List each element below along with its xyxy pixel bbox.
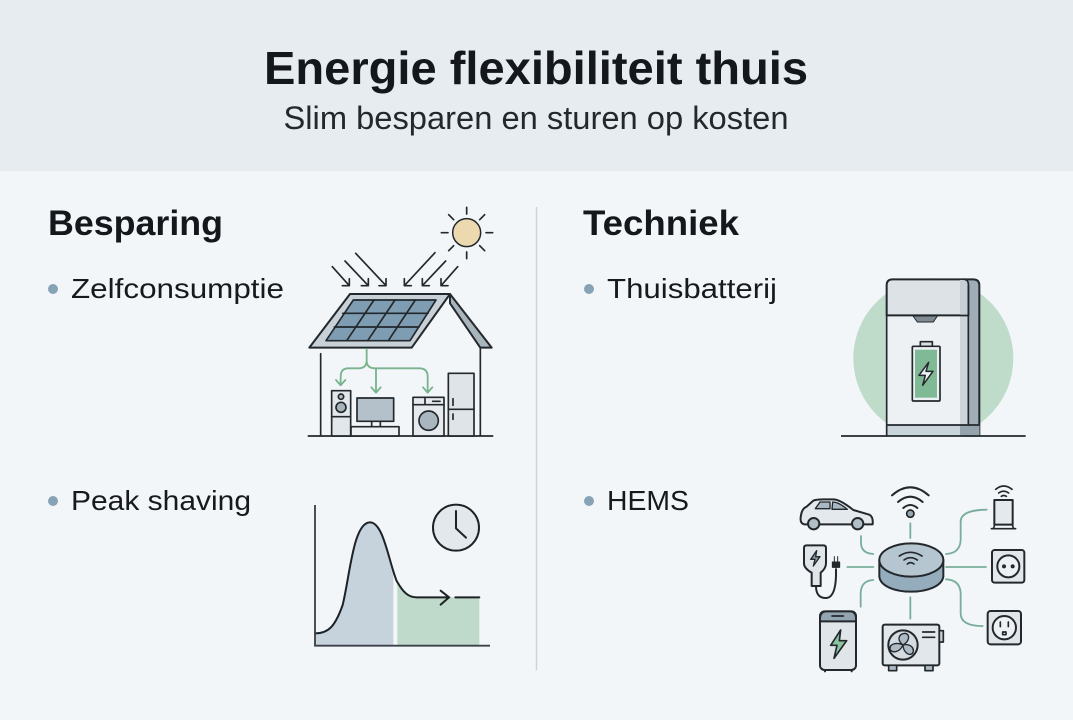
chart fill: shifted load xyxy=(397,582,479,645)
illustration: home battery xyxy=(841,278,1026,436)
list item: HEMS: HEMS xyxy=(607,485,689,516)
icon: sun xyxy=(441,207,493,259)
roof and solar panel xyxy=(309,294,492,348)
heading: Techniek: Techniek xyxy=(583,204,740,243)
appliance: television xyxy=(351,398,399,436)
illustration: HEMS network xyxy=(801,486,1024,671)
icon: heat pump xyxy=(883,625,943,671)
icon: wifi xyxy=(892,487,929,517)
icon: US socket xyxy=(988,611,1021,644)
appliance: refrigerator xyxy=(448,373,474,436)
load curve xyxy=(315,522,479,633)
illustration: house with solar panels xyxy=(308,207,493,436)
icon: router xyxy=(991,486,1016,529)
arrows: sunlight xyxy=(332,253,458,286)
heading: Besparing: Besparing xyxy=(48,204,223,243)
battery symbol xyxy=(912,342,940,401)
ground line xyxy=(841,433,1026,438)
icon: car xyxy=(801,499,873,529)
battery cabinet xyxy=(887,279,979,436)
chart: peak shaving xyxy=(315,505,490,646)
icon: home battery xyxy=(820,611,856,671)
list item: Zelfconsumptie: Zelfconsumptie xyxy=(71,273,284,304)
arrows: green energy flow xyxy=(336,349,432,393)
icon: EV charger xyxy=(804,545,840,598)
appliance: washing machine xyxy=(413,397,444,436)
appliance: speaker xyxy=(332,391,351,436)
list item: Thuisbatterij: Thuisbatterij xyxy=(607,273,777,304)
hub device xyxy=(879,543,943,592)
connectors xyxy=(847,510,987,626)
house walls xyxy=(308,348,493,436)
subtitle: Slim besparen en sturen op kosten xyxy=(284,100,788,136)
green circle backdrop xyxy=(853,278,1013,423)
icon: wall socket xyxy=(992,550,1024,583)
list item: Peak shaving: Peak shaving xyxy=(71,485,251,516)
title: Energie flexibiliteit thuis xyxy=(264,42,808,94)
chart axes xyxy=(315,505,490,646)
header band xyxy=(0,0,1073,171)
chart fill: peak xyxy=(315,522,393,645)
icon: clock xyxy=(433,505,479,551)
